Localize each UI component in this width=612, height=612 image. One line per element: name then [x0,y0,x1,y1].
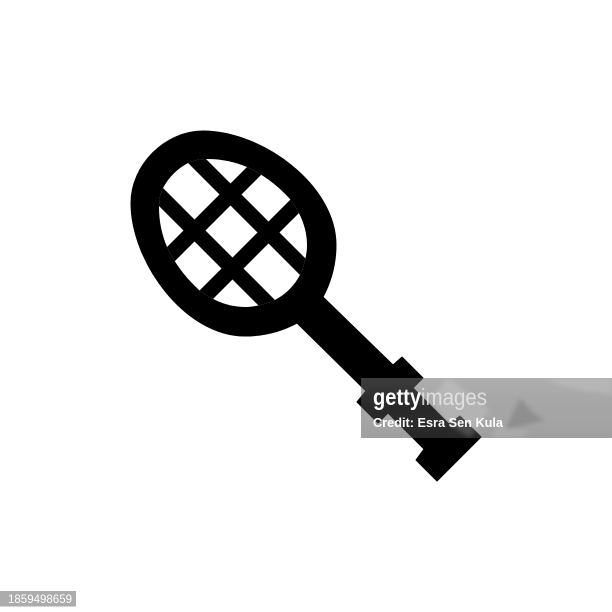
watermark logo text [374,388,486,410]
watermark logo text: getty [373,384,421,410]
racket strings [159,159,306,306]
watermark panel [361,378,612,438]
icon: badminton racket [131,131,481,481]
racket head and handle [131,131,481,481]
image id tag [0,591,76,606]
watermark credit text: Credit: Esra Sen Kula [373,415,504,430]
racket opening [159,159,307,307]
image id tag: 1859498659 [8,594,72,606]
watermark logo text: images [421,384,487,410]
